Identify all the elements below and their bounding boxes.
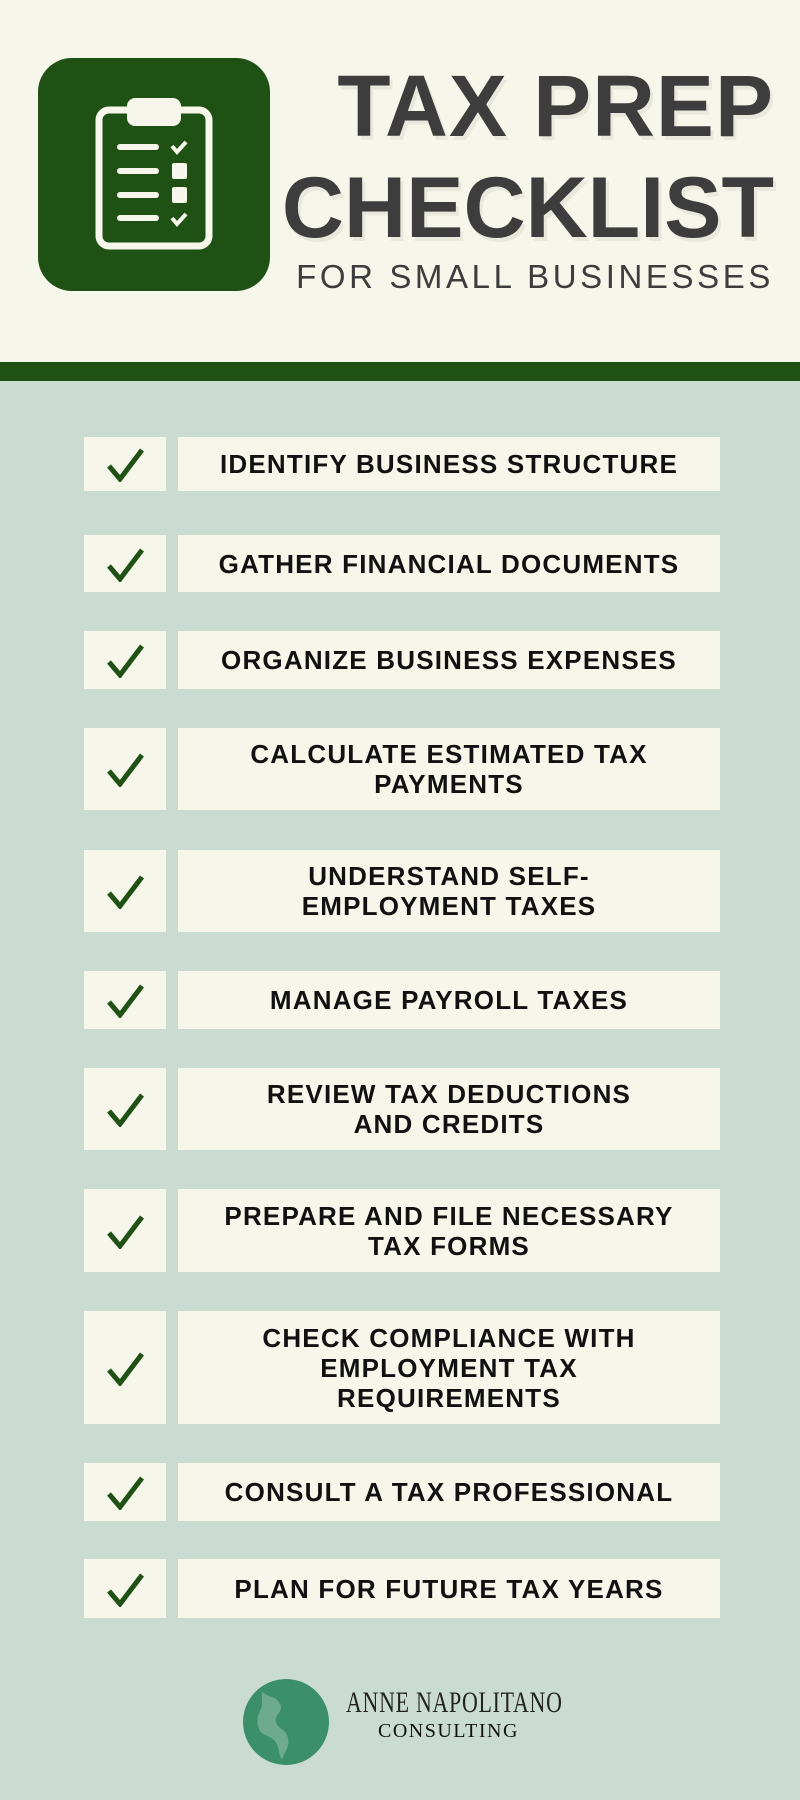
logo subtext: CONSULTING — [378, 1720, 519, 1742]
checklist item 1 — [84, 437, 720, 491]
checklist item 5 — [84, 850, 720, 932]
checklist item 9: CHECK COMPLIANCE WITH — [262, 1322, 636, 1352]
checklist item 8: TAX FORMS — [368, 1230, 530, 1260]
header background — [0, 0, 800, 362]
logo — [243, 1679, 563, 1765]
checklist item 8 — [84, 1189, 720, 1272]
checklist item 5: UNDERSTAND SELF- — [308, 861, 590, 891]
icon: clipboard — [38, 58, 270, 291]
checklist item 9 — [84, 1311, 720, 1424]
checklist item 3: ORGANIZE BUSINESS EXPENSES — [221, 645, 677, 675]
title: TAX PREP — [337, 58, 774, 155]
checklist item 2: GATHER FINANCIAL DOCUMENTS — [219, 548, 679, 578]
checklist item 6 — [84, 971, 720, 1029]
logo text: ANNE NAPOLITANO — [346, 1686, 563, 1719]
checklist item 7 — [84, 1068, 720, 1150]
checklist item 4: CALCULATE ESTIMATED TAX — [250, 739, 648, 769]
checklist item 11: PLAN FOR FUTURE TAX YEARS — [234, 1574, 664, 1604]
subtitle: FOR SMALL BUSINESSES — [296, 258, 774, 295]
checklist item 8: PREPARE AND FILE NECESSARY — [224, 1200, 674, 1230]
checklist item 4 — [84, 728, 720, 810]
checklist item 1: IDENTIFY BUSINESS STRUCTURE — [220, 449, 678, 479]
checklist item 3 — [84, 631, 720, 689]
title line 2: CHECKLIST — [282, 160, 774, 256]
checklist item 2 — [84, 535, 720, 592]
checklist item 10 — [84, 1463, 720, 1521]
checklist item 9: REQUIREMENTS — [337, 1382, 561, 1412]
checklist item 7: REVIEW TAX DEDUCTIONS — [267, 1079, 631, 1109]
checklist item 6: MANAGE PAYROLL TAXES — [270, 985, 628, 1015]
icon: globe — [243, 1679, 329, 1765]
checklist item 11 — [84, 1559, 720, 1618]
checklist item 10: CONSULT A TAX PROFESSIONAL — [225, 1477, 673, 1507]
checklist item 4: PAYMENTS — [374, 769, 524, 799]
checklist item 9: EMPLOYMENT TAX — [320, 1352, 578, 1382]
checklist item 7: AND CREDITS — [354, 1109, 544, 1139]
checklist item 5: EMPLOYMENT TAXES — [302, 891, 596, 921]
